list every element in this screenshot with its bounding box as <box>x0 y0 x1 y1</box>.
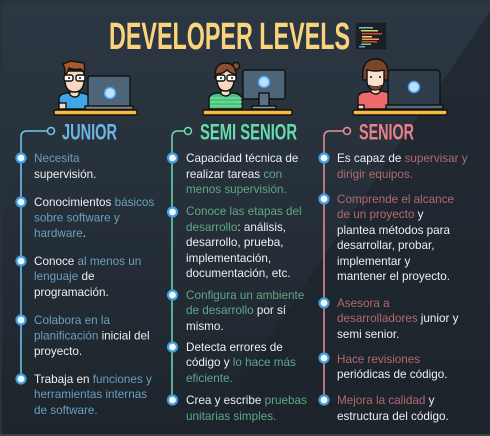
text: junior items: programación. <box>34 286 109 299</box>
text: junior items <box>34 152 154 417</box>
text: senior items: Es capaz de supervisar y <box>337 152 468 165</box>
desk <box>203 110 292 115</box>
text: junior items: lenguaje de <box>34 270 94 283</box>
text: semi senior items: Configura un ambiente <box>186 289 304 302</box>
text: junior items: Necesita <box>34 152 80 165</box>
heading: senior: SENIOR <box>359 120 414 144</box>
text: senior items: plantea métodos para <box>337 224 451 237</box>
text: semi senior items: Detecta errores de <box>186 341 283 354</box>
title: DEVELOPER LEVELS <box>109 16 350 58</box>
head <box>65 71 84 92</box>
text: senior items: periódicas de código. <box>337 368 447 381</box>
heading: semi senior: SEMI SENIOR <box>200 120 297 144</box>
text: semi senior items: implementación, <box>186 252 271 265</box>
text: senior items: estructura del código. <box>337 410 449 423</box>
timeline: senior <box>320 128 350 404</box>
text: semi senior items: menos supervisión. <box>186 183 287 196</box>
text: senior items: mantener el proyecto. <box>337 270 450 283</box>
illustration: senior developer <box>353 59 447 115</box>
illustration: junior developer <box>54 61 137 115</box>
text: junior items: de software. <box>34 404 98 417</box>
text: semi senior items: desarrollo, prueba, <box>186 236 283 249</box>
text: senior items: desarrolladores junior y <box>337 312 459 325</box>
text: semi senior items: mismo. <box>186 320 224 333</box>
text: semi senior items: código y lo hace más <box>186 356 296 369</box>
desk <box>353 110 447 115</box>
text: senior items <box>337 152 468 423</box>
hair and head <box>232 62 240 70</box>
icon: code window <box>355 22 387 50</box>
text: senior items: Asesora a <box>337 297 390 310</box>
text: junior items: Trabaja en funciones y <box>34 373 152 386</box>
heading: junior: JUNIOR <box>62 120 117 144</box>
laptop <box>388 70 440 106</box>
text: semi senior items: Conoce las etapas del <box>186 205 302 218</box>
text: semi senior items: realizar tareas con <box>186 168 282 181</box>
text: senior items: implementar y <box>337 255 411 268</box>
text: senior items: desarrollar, probar, <box>337 239 434 252</box>
text: semi senior items: desarrollo: análisis, <box>186 221 286 234</box>
body <box>209 93 242 109</box>
text: junior items: Colabora en la <box>34 314 111 327</box>
text: senior items: Hace revisiones <box>337 353 420 366</box>
text: junior items: planificación inicial del <box>34 330 150 342</box>
text: junior items: sobre software y <box>34 212 120 224</box>
body <box>59 93 90 109</box>
text: senior items: dirigir equipos. <box>337 168 413 181</box>
text: semi senior items: Crea y escribe pruebas <box>186 394 307 407</box>
text: senior items: Comprende el alcance <box>337 193 454 206</box>
timeline: junior <box>16 128 54 384</box>
text: semi senior items: Capacidad técnica de <box>186 152 298 165</box>
text: junior items: proyecto. <box>34 345 82 358</box>
timeline: semi senior <box>168 128 192 404</box>
text: senior items: Mejora la calidad y <box>337 394 435 407</box>
body <box>358 91 391 109</box>
text: semi senior items: de desarrollo por sí <box>186 304 287 317</box>
illustration: semi senior developer <box>203 62 292 115</box>
text: semi senior items: eficiente. <box>186 372 233 385</box>
desk <box>54 110 137 115</box>
laptop <box>88 76 130 107</box>
text: semi senior items: documentación, etc. <box>186 267 291 280</box>
text: semi senior items <box>186 152 307 423</box>
text: junior items: hardware. <box>34 227 86 240</box>
text: junior items: Conocimientos básicos <box>34 196 154 209</box>
text: semi senior items: unitarias simples. <box>186 410 276 423</box>
monitor <box>243 70 285 99</box>
text: junior items: Conoce al menos un <box>34 255 141 268</box>
text: junior items: supervisión. <box>34 168 96 181</box>
text: senior items: de un proyecto y <box>337 208 424 221</box>
head <box>363 59 388 80</box>
text: junior items: herramientas internas <box>34 388 147 401</box>
text: senior items: semi senior. <box>337 328 399 341</box>
